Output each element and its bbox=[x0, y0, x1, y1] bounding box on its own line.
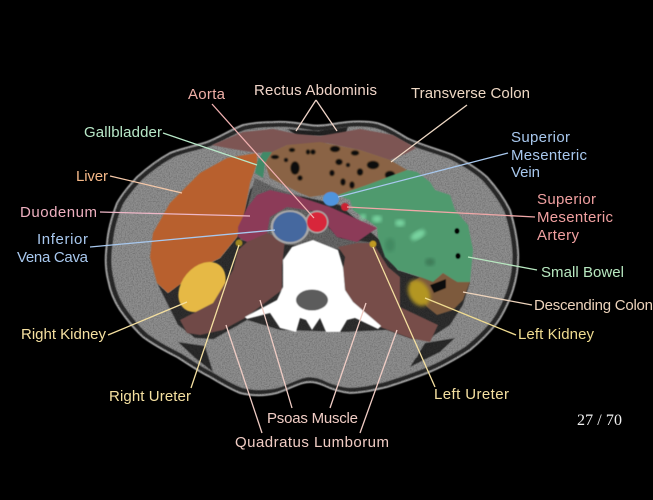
label: Inferior Vena Cava: Inferior bbox=[37, 231, 88, 248]
label: Superior Mesenteric Vein: Vein bbox=[511, 164, 540, 181]
subcutaneous tissue bbox=[111, 127, 513, 390]
label: Superior Mesenteric Artery: Superior bbox=[537, 191, 596, 208]
label: Inferior Vena Cava bbox=[17, 230, 275, 266]
skin and dark fat ring bbox=[106, 121, 518, 395]
organ: aorta bbox=[307, 212, 327, 232]
label: Descending Colon bbox=[463, 292, 653, 314]
label: Superior Mesenteric Vein: Mesenteric bbox=[511, 147, 588, 164]
dark fat around kidney bbox=[157, 180, 470, 345]
label: Small Bowel: Small Bowel bbox=[541, 264, 624, 281]
organ: superior mesenteric artery bbox=[341, 203, 349, 211]
label: Left Kidney bbox=[425, 298, 594, 343]
label: Psoas Muscle: Psoas Muscle bbox=[267, 410, 358, 427]
vertebra bbox=[245, 240, 381, 332]
label: Superior Mesenteric Vein bbox=[338, 129, 588, 197]
organ: gallbladder bbox=[255, 152, 272, 178]
label: Aorta: Aorta bbox=[188, 86, 226, 103]
label: Aorta bbox=[188, 86, 314, 218]
spinal canal bbox=[296, 290, 328, 310]
organ: inferior vena cava bbox=[273, 212, 307, 242]
label: Superior Mesenteric Artery: Artery bbox=[537, 227, 580, 244]
organ: rectus abdominis bbox=[212, 129, 416, 160]
label: Left Ureter: Left Ureter bbox=[434, 386, 509, 403]
label: Duodenum: Duodenum bbox=[20, 204, 97, 221]
label: Descending Colon: Descending Colon bbox=[534, 297, 653, 314]
organ: left psoas and quadratus bbox=[338, 243, 438, 342]
label: Superior Mesenteric Artery: Mesenteric bbox=[537, 209, 614, 226]
label: Transverse Colon: Transverse Colon bbox=[411, 85, 530, 102]
organ: superior mesenteric vein bbox=[323, 192, 339, 206]
label: Quadratus Lumborum bbox=[226, 325, 397, 451]
aorta halo bbox=[306, 210, 328, 234]
colon gas pocket bbox=[430, 279, 446, 293]
organ: right kidney bbox=[169, 253, 235, 321]
label: Duodenum bbox=[20, 204, 250, 221]
CT noise texture bbox=[106, 122, 518, 395]
organ: small bowel bbox=[338, 170, 473, 282]
label: Right Ureter bbox=[109, 245, 239, 405]
CT body cross-section bbox=[106, 121, 518, 395]
label: Rectus Abdominis: Rectus Abdominis bbox=[254, 82, 377, 99]
organ: transverse colon bbox=[265, 142, 407, 197]
label: Gallbladder: Gallbladder bbox=[84, 124, 162, 141]
organ: liver bbox=[150, 153, 257, 293]
label: Transverse Colon bbox=[391, 85, 530, 162]
posterior dark fat pocket left bbox=[178, 342, 213, 372]
label: Left Ureter bbox=[373, 247, 509, 403]
label: Right Kidney: Right Kidney bbox=[21, 326, 106, 343]
label: Psoas Muscle bbox=[260, 300, 366, 427]
organ: right ureter bbox=[236, 240, 242, 246]
label: Inferior Vena Cava: Vena Cava bbox=[17, 249, 89, 266]
label: Left Kidney: Left Kidney bbox=[518, 326, 594, 343]
organ: duodenum bbox=[238, 190, 377, 242]
vena cava halo bbox=[270, 210, 310, 244]
organ: right psoas and quadratus bbox=[180, 233, 285, 335]
paraspinal muscles bbox=[207, 320, 423, 388]
label: Right Ureter: Right Ureter bbox=[109, 388, 191, 405]
organ: left kidney bbox=[403, 276, 435, 310]
label: Right Kidney bbox=[21, 302, 187, 343]
label: Superior Mesenteric Vein: Superior bbox=[511, 129, 570, 146]
label: Superior Mesenteric Artery bbox=[347, 191, 614, 244]
organ: descending colon bbox=[410, 273, 470, 315]
segmented organs bbox=[150, 129, 473, 342]
label: Small Bowel bbox=[468, 257, 624, 281]
colon gas bbox=[271, 146, 395, 188]
posterior dark fat pocket right bbox=[410, 338, 455, 367]
bowel bright spots and gas bbox=[360, 214, 461, 266]
central dark fat band at top bbox=[287, 127, 348, 136]
label: Quadratus Lumborum: Quadratus Lumborum bbox=[235, 434, 389, 451]
organ: left ureter bbox=[370, 240, 376, 248]
label: Rectus Abdominis bbox=[254, 82, 377, 131]
label: Liver bbox=[76, 168, 182, 193]
infographic: labelled axial CT slice of the abdomen bbox=[17, 84, 652, 450]
retroperitoneal gray fat bbox=[240, 178, 375, 250]
label: Gallbladder bbox=[84, 124, 257, 165]
label: Liver: Liver bbox=[76, 168, 108, 185]
slice counter: 27 / 70 bbox=[577, 412, 622, 429]
